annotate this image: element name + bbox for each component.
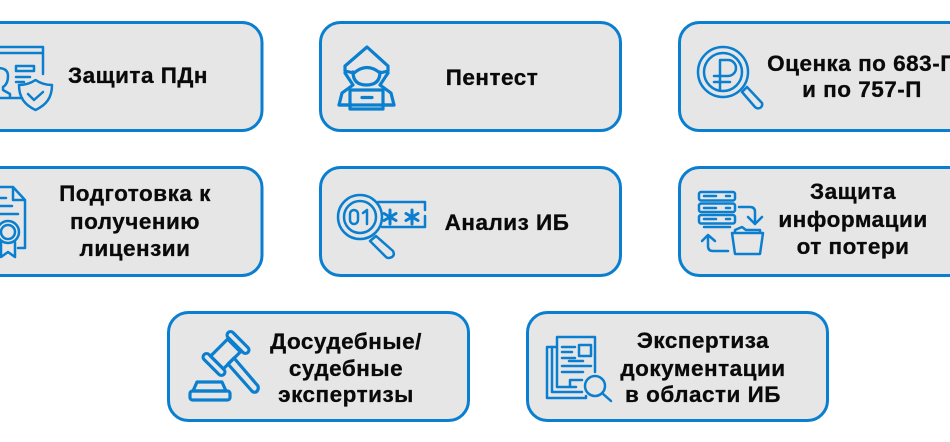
panel: license preparation bbox=[0, 168, 262, 276]
label: Защита информации от потери bbox=[778, 179, 928, 259]
panel: pre-trial and court examinations bbox=[168, 312, 468, 420]
icon: servers and folder with arrows bbox=[699, 192, 763, 254]
label: Защита информации от потери: информации bbox=[778, 207, 928, 232]
label: Досудебные/ судебные экспертизы: экспертизы bbox=[278, 382, 414, 407]
label: Оценка по 683-П и по 757-П: и по 757-П bbox=[802, 77, 922, 102]
label: Защита ПДн: Защита ПДн bbox=[68, 63, 208, 88]
label: Защита информации от потери: Защита bbox=[810, 179, 896, 204]
label: Подготовка к получению лицензии: лицензии bbox=[80, 236, 190, 261]
label: Оценка по 683-П и по 757-П bbox=[767, 51, 950, 102]
label: Подготовка к получению лицензии: получению bbox=[70, 209, 200, 234]
panel: data loss protection bbox=[680, 168, 950, 276]
icon: ruble under magnifier bbox=[698, 47, 762, 108]
label: Защита информации от потери: от потери bbox=[797, 234, 909, 259]
icon: profile card with shield bbox=[0, 47, 52, 110]
label: Подготовка к получению лицензии: Подготовка к bbox=[59, 181, 211, 206]
label: Досудебные/ судебные экспертизы: судебные bbox=[289, 356, 403, 381]
icon: certificate with rosette bbox=[0, 187, 25, 257]
label: Анализ ИБ: Анализ ИБ bbox=[445, 210, 569, 235]
label: Экспертиза документации в области ИБ bbox=[620, 328, 786, 407]
label: Подготовка к получению лицензии bbox=[59, 181, 211, 261]
icon: judge gavel bbox=[190, 330, 258, 400]
panel: security analysis bbox=[320, 168, 620, 276]
panel: pentest bbox=[320, 22, 620, 130]
label: Пентест: Пентест bbox=[446, 65, 538, 90]
panel: personal data protection bbox=[0, 22, 262, 130]
label: Досудебные/ судебные экспертизы bbox=[270, 329, 422, 407]
icon: hooded hacker with laptop bbox=[339, 47, 394, 109]
icon: magnifier over masked code bbox=[338, 195, 425, 258]
label: Экспертиза документации в области ИБ: в области ИБ bbox=[625, 382, 781, 407]
label: Экспертиза документации в области ИБ: документации bbox=[620, 356, 786, 381]
panel: documentation examination bbox=[528, 312, 828, 420]
panel: 683-P and 757-P assessment bbox=[680, 22, 950, 130]
label: Экспертиза документации в области ИБ: Экспертиза bbox=[637, 328, 769, 353]
label: Досудебные/ судебные экспертизы: Досудебные/ bbox=[270, 329, 422, 354]
icon: documents with magnifier bbox=[547, 337, 611, 401]
